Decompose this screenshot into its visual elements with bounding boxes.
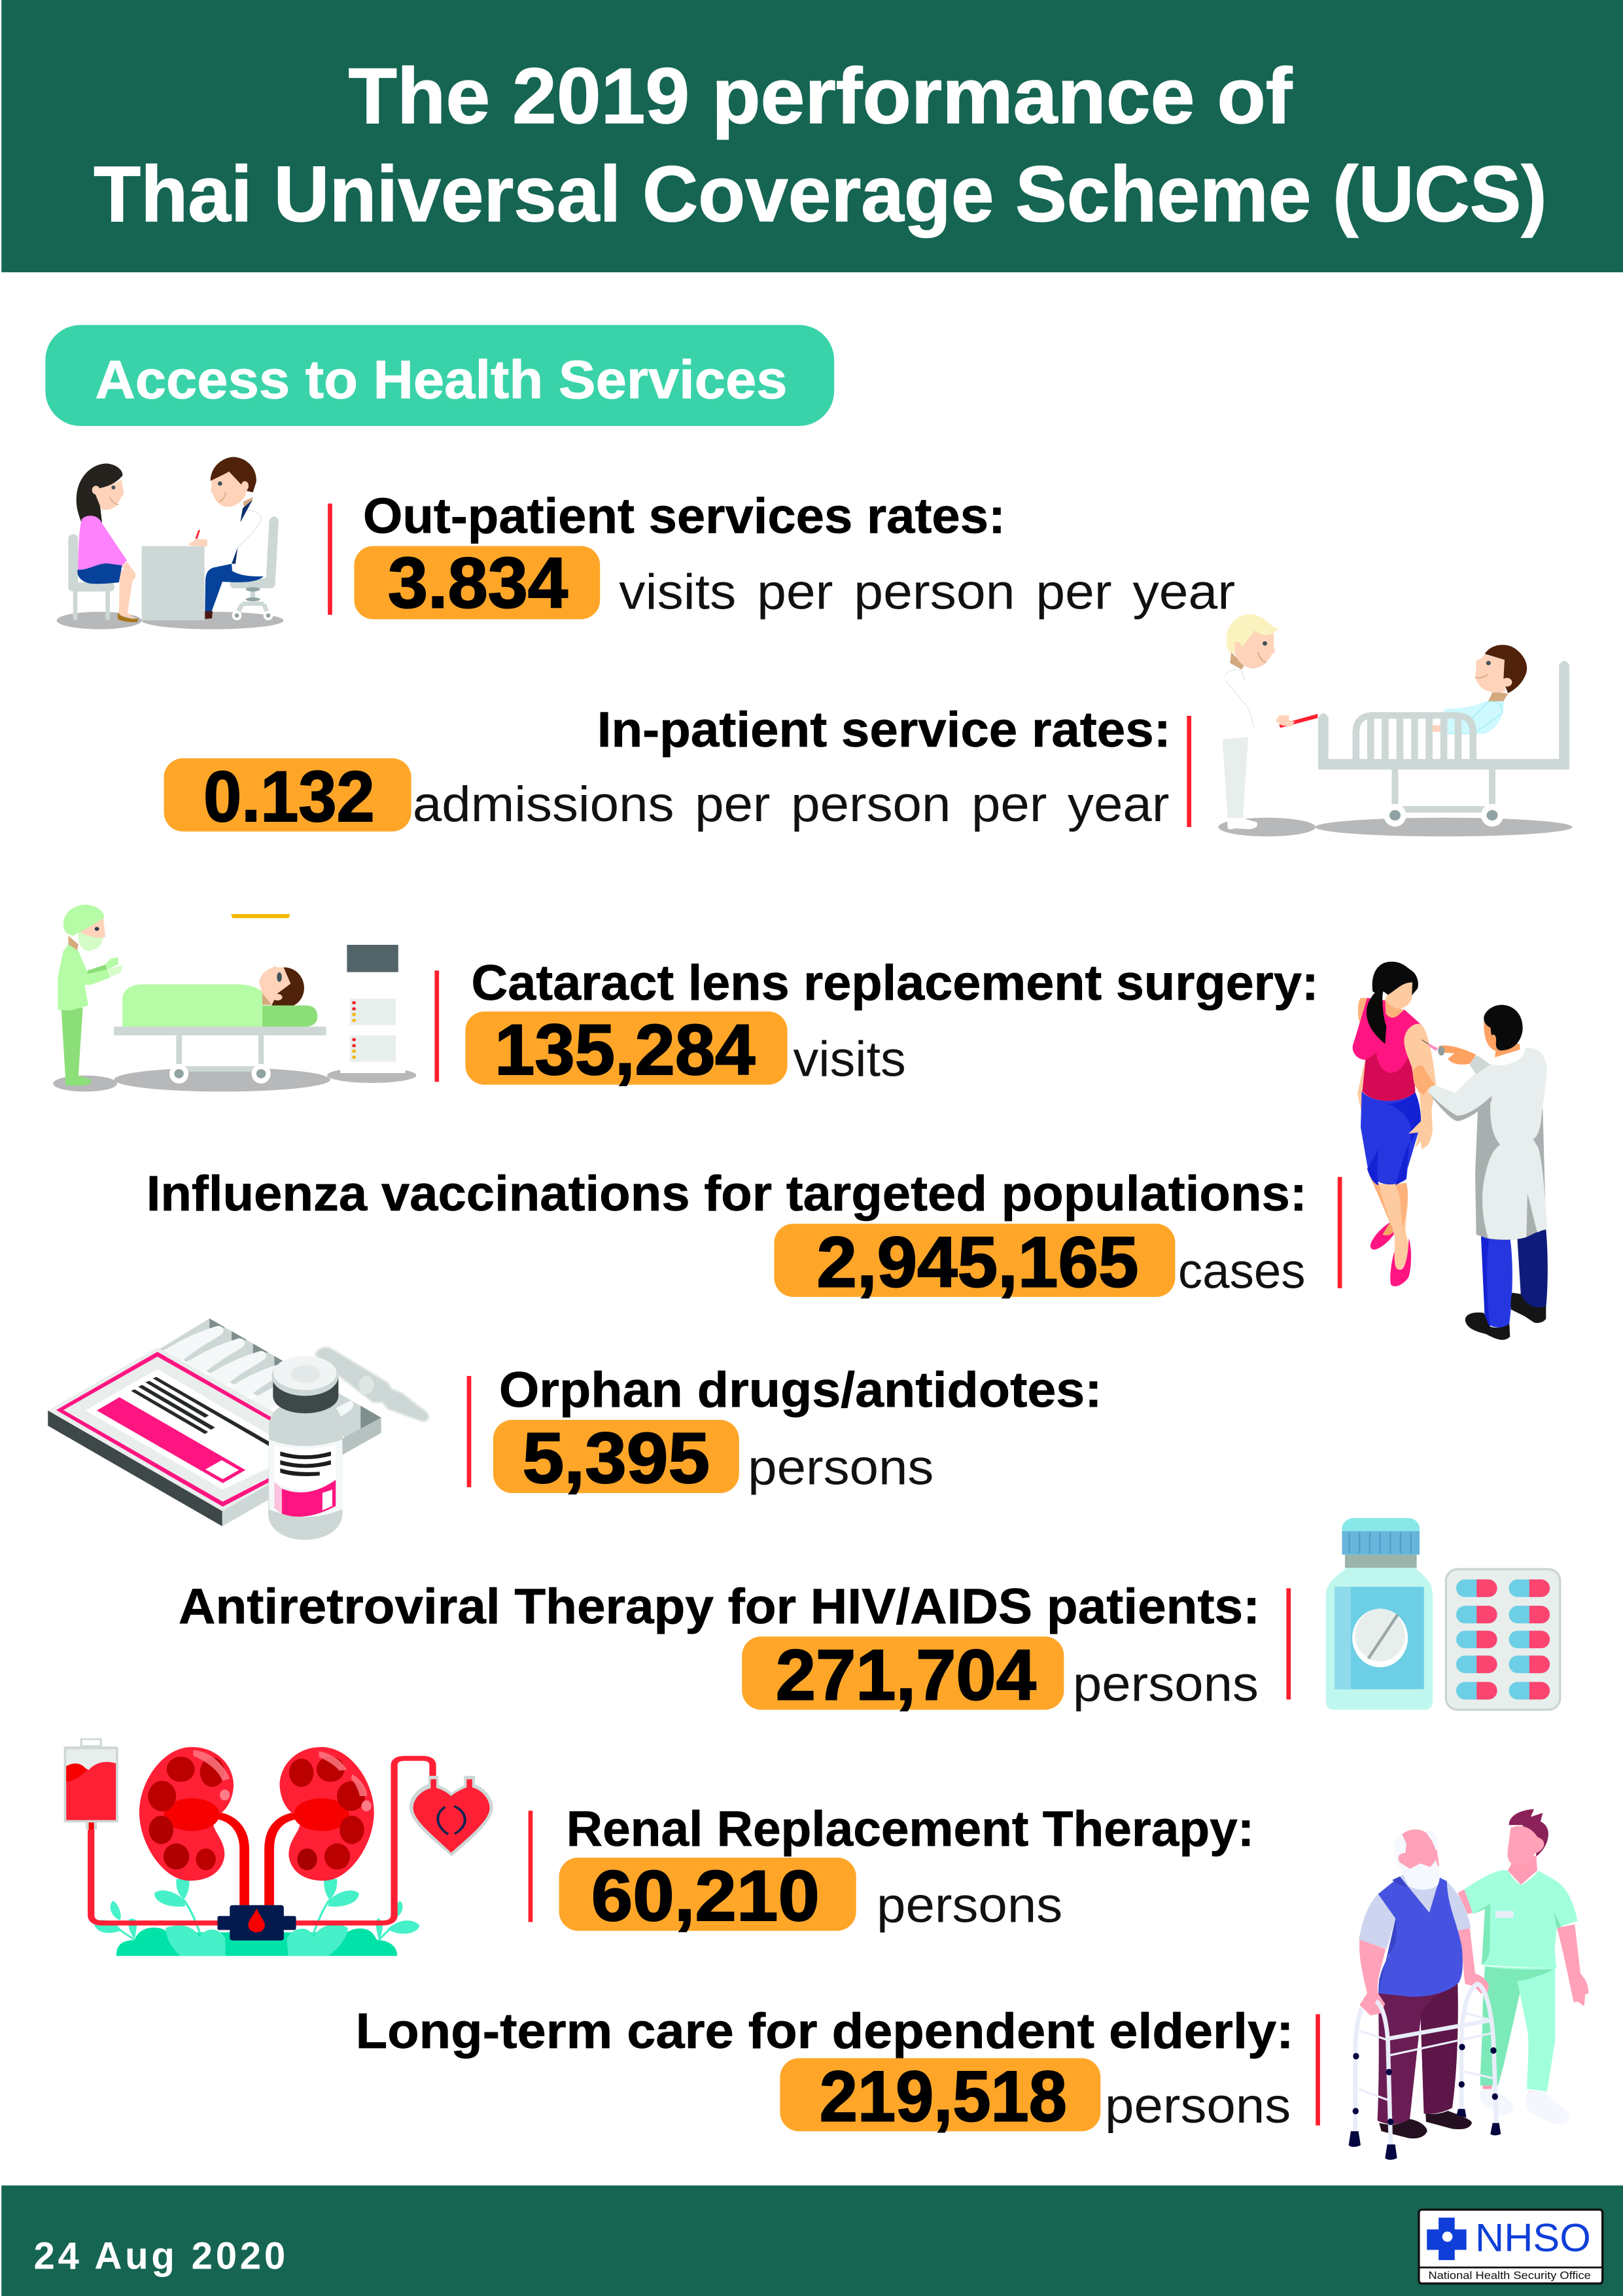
item: influenza vaccinations for targeted populations: 2,945,165 <box>816 1222 1139 1302</box>
item: orphan drugs/antidotes: Orphan drugs/antidotes: <box>499 1362 1102 1418</box>
divider: renal <box>529 1810 532 1922</box>
item: renal replacement therapy: persons <box>877 1877 1062 1933</box>
icon: woman receiving a vaccination from a doctor <box>1353 962 1548 1340</box>
logo: NHSO: NHSO <box>1475 2216 1591 2260</box>
title <box>94 52 1547 238</box>
icon: nurse helping an elderly man with a walker <box>1349 1809 1588 2160</box>
item: influenza vaccinations for targeted populations: Influenza vaccinations for targeted populations: <box>147 1166 1307 1222</box>
item: in-patient service rates <box>164 702 1171 837</box>
icon: cataract surgery <box>53 905 416 1091</box>
divider: orphan drugs <box>467 1376 471 1487</box>
item: antiretroviral therapy for HIV/AIDS patients: persons <box>1073 1657 1259 1712</box>
publication date: 24 Aug 2020 <box>33 2235 285 2278</box>
item: out-patient services rates: visits per person per year <box>619 565 1235 620</box>
item: antiretroviral therapy for HIV/AIDS patients: Antiretroviral Therapy for HIV/AIDS patients: <box>179 1579 1260 1634</box>
item: orphan drugs/antidotes: 5,395 <box>523 1419 710 1498</box>
icon: patient consulting a doctor <box>57 457 283 629</box>
footer bar <box>1 2185 1623 2296</box>
title: Thai Universal Coverage Scheme (UCS) <box>94 150 1547 238</box>
item: antiretroviral therapy for HIV/AIDS patients <box>179 1579 1260 1715</box>
capsules <box>1456 1580 1550 1699</box>
item: cataract lens replacement surgery: Cataract lens replacement surgery: <box>471 955 1319 1011</box>
divider: influenza <box>1338 1177 1342 1288</box>
item: out-patient services rates: 3.834 <box>388 543 568 623</box>
icon: kidneys, dialysis tubing and heart <box>64 1739 493 1956</box>
title: The 2019 performance of <box>348 52 1293 140</box>
divider: in-patient <box>1187 716 1191 827</box>
item: out-patient services rates: Out-patient services rates: <box>363 488 1005 544</box>
item: influenza vaccinations for targeted populations <box>147 1166 1307 1302</box>
item: in-patient service rates: admissions per person per year <box>413 777 1169 832</box>
item: long-term care for dependent elderly: persons <box>1105 2078 1291 2134</box>
item: renal replacement therapy: Renal Replacement Therapy: <box>567 1801 1254 1857</box>
item: long-term care for dependent elderly <box>356 2004 1294 2137</box>
item: influenza vaccinations for targeted populations: cases <box>1178 1244 1306 1299</box>
icon: nurse beside patient in bed <box>1218 614 1573 836</box>
section heading: Access to Health Services: Access to Health Services <box>95 349 788 410</box>
divider: out-patient <box>328 504 332 615</box>
divider: antiretroviral <box>1286 1588 1291 1699</box>
item: orphan drugs/antidotes <box>493 1362 1102 1498</box>
icon: medicine box, vial and ampoule <box>48 1318 428 1540</box>
logo: NHSO <box>1419 2210 1603 2284</box>
item: out-patient services rates <box>354 488 1235 623</box>
item: orphan drugs/antidotes: persons <box>748 1439 934 1495</box>
item: renal replacement therapy: 60,210 <box>591 1856 820 1936</box>
divider: long-term care <box>1316 2014 1320 2125</box>
item: cataract lens replacement surgery <box>465 955 1319 1090</box>
item: in-patient service rates: In-patient service rates: <box>597 702 1171 758</box>
item: renal replacement therapy <box>559 1801 1254 1936</box>
item: cataract lens replacement surgery: visits <box>794 1031 906 1087</box>
section heading: Access to Health Services <box>45 325 834 426</box>
item: in-patient service rates: 0.132 <box>203 757 375 837</box>
item: cataract lens replacement surgery: 135,284 <box>495 1010 755 1090</box>
item: long-term care for dependent elderly: Long-term care for dependent elderly: <box>356 2004 1294 2059</box>
header banner <box>1 0 1623 272</box>
divider: cataract <box>434 970 439 1082</box>
icon: pill bottle and blister pack <box>1326 1518 1560 1710</box>
logo: NHSO: National Health Security Office <box>1428 2269 1591 2282</box>
item: long-term care for dependent elderly: 219,518 <box>820 2057 1067 2137</box>
item: antiretroviral therapy for HIV/AIDS patients: 271,704 <box>776 1635 1036 1715</box>
